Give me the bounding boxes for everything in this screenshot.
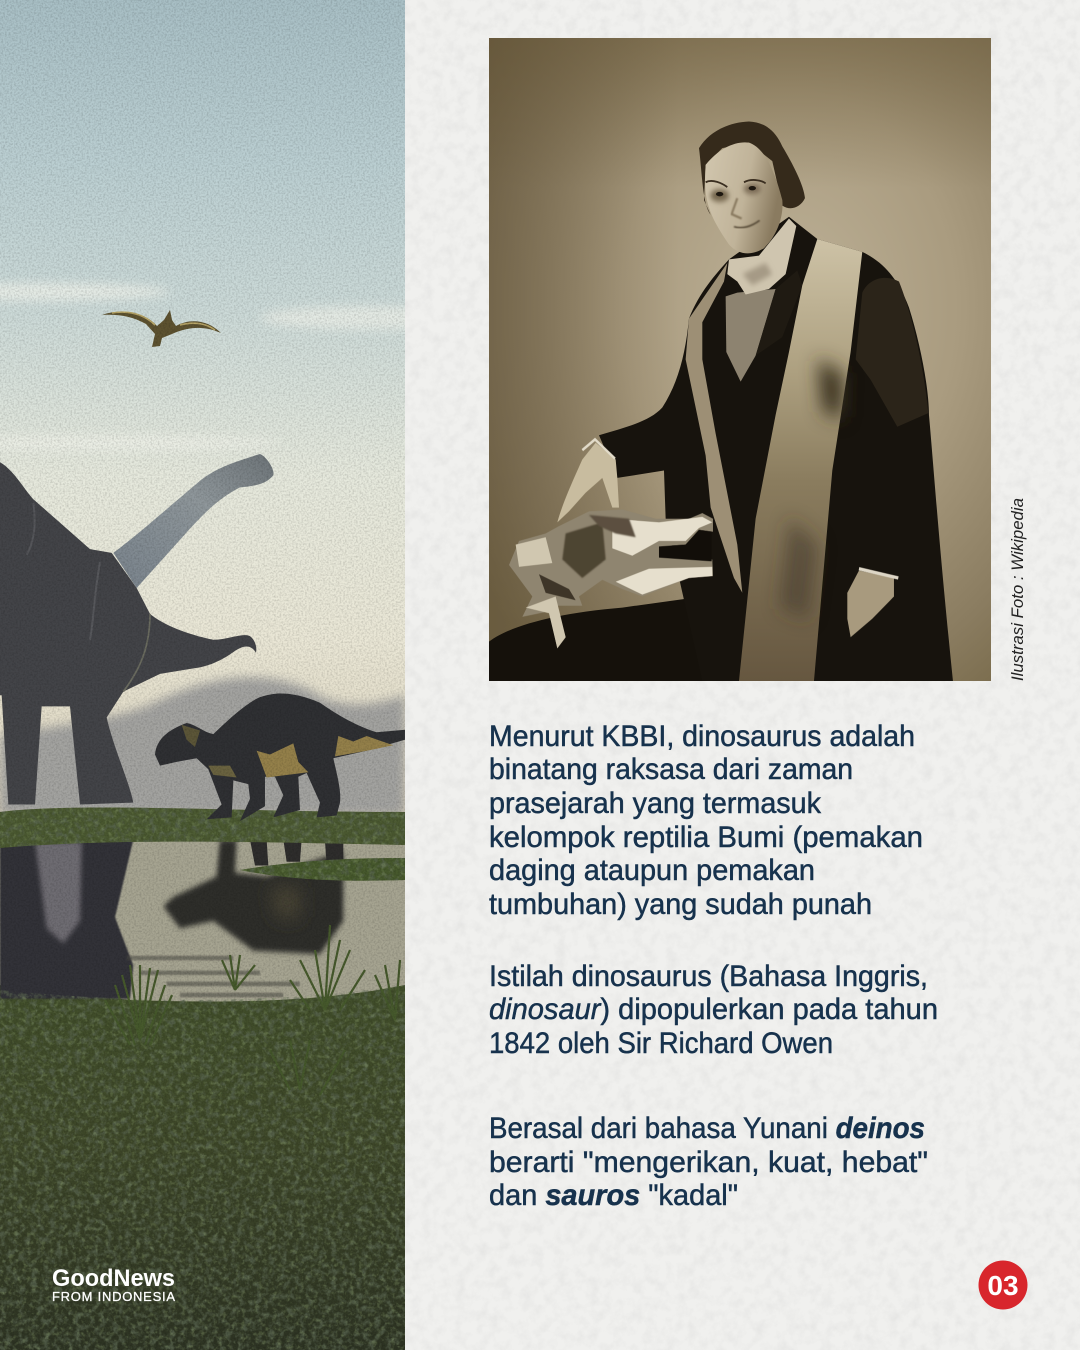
left hand and cuff <box>557 439 619 522</box>
robe sleeve highlight <box>856 278 928 427</box>
portrait photo of Sir Richard Owen <box>489 38 991 681</box>
text block: origin of the term <box>489 960 938 1060</box>
text block: origin of the term: dinosaur) dipopulerkan pada tahun <box>489 993 938 1026</box>
text block: KBBI definition: prasejarah yang termasuk <box>489 787 822 820</box>
text block: Greek etymology: dan sauros "kadal" <box>489 1179 738 1212</box>
logo: GoodNews from Indonesia <box>52 1265 175 1304</box>
text block: KBBI definition: tumbuhan) yang sudah punah <box>489 888 872 921</box>
face <box>705 142 783 253</box>
water reflections <box>0 840 343 999</box>
ground <box>0 985 405 1350</box>
text block: Greek etymology <box>489 1112 928 1212</box>
page number badge: 03 <box>987 1270 1019 1301</box>
logo: GoodNews from Indonesia: GoodNews <box>52 1265 175 1292</box>
big dinosaur body <box>0 462 256 804</box>
waistcoat <box>726 289 776 382</box>
cravat and collar <box>727 219 796 295</box>
sash shadows <box>779 359 844 619</box>
distant hazy hills <box>0 678 405 815</box>
text block: KBBI definition: binatang raksasa dari zaman <box>489 753 853 786</box>
robe <box>599 217 953 681</box>
text block: Greek etymology: berarti "mengerikan, kuat, hebat" <box>489 1146 928 1179</box>
page number badge <box>978 1260 1028 1310</box>
vertical photo credit: Ilustrasi Foto : Wikipedia <box>1008 498 1027 681</box>
text block: Greek etymology: Berasal dari bahasa Yunani deinos <box>489 1112 925 1145</box>
left stole <box>686 263 742 593</box>
foreground grass tufts <box>105 925 400 1095</box>
main sash <box>739 239 862 681</box>
text block: origin of the term: 1842 oleh Sir Richard Owen <box>489 1027 833 1060</box>
hair <box>699 121 805 215</box>
paper background <box>405 0 1080 1350</box>
text block: KBBI definition: daging ataupun pemakan <box>489 854 815 887</box>
fossil skull <box>509 509 713 648</box>
far bank and ground grass <box>0 800 405 1350</box>
eyes and mouth <box>706 180 766 228</box>
text block: KBBI definition: Menurut KBBI, dinosaurus adalah <box>489 720 915 753</box>
panel: dinosaur landscape photo <box>0 0 405 1350</box>
logo: GoodNews from Indonesia: FROM INDONESIA <box>52 1289 175 1304</box>
big dinosaur raised neck <box>113 454 274 588</box>
photo background <box>489 38 991 681</box>
text block: origin of the term: Istilah dinosaurus (Bahasa Inggris, <box>489 960 928 993</box>
pterosaur <box>102 310 221 347</box>
right hand and cuff <box>847 569 898 637</box>
film grain overlay <box>0 0 405 1350</box>
water pond <box>0 838 405 1001</box>
sky <box>0 0 405 812</box>
small dinosaur <box>155 694 405 821</box>
table <box>489 599 702 681</box>
text block: KBBI definition <box>489 720 923 921</box>
text block: KBBI definition: kelompok reptilia Bumi (pemakan <box>489 821 923 854</box>
